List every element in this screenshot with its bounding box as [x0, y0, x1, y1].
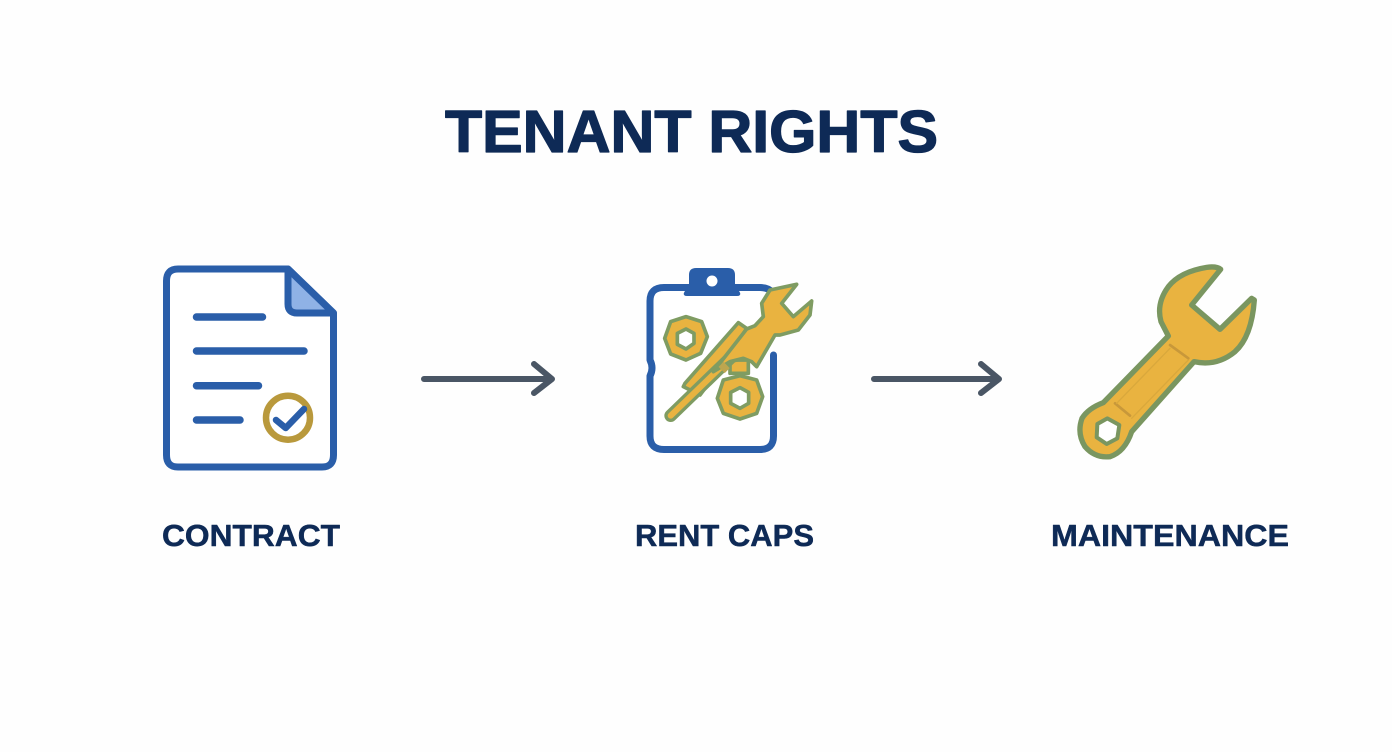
title: TENANT RIGHTS [445, 99, 938, 165]
label: rent caps: RENT CAPS [635, 518, 814, 553]
icon: rent caps clipboard [650, 269, 812, 450]
icon: maintenance wrench [1080, 267, 1254, 457]
arrow: contract to rent caps [424, 364, 552, 393]
label: contract: CONTRACT [162, 518, 340, 553]
icon: contract document [166, 269, 334, 467]
label: maintenance: MAINTENANCE [1051, 518, 1289, 553]
arrow: rent caps to maintenance [874, 364, 999, 393]
